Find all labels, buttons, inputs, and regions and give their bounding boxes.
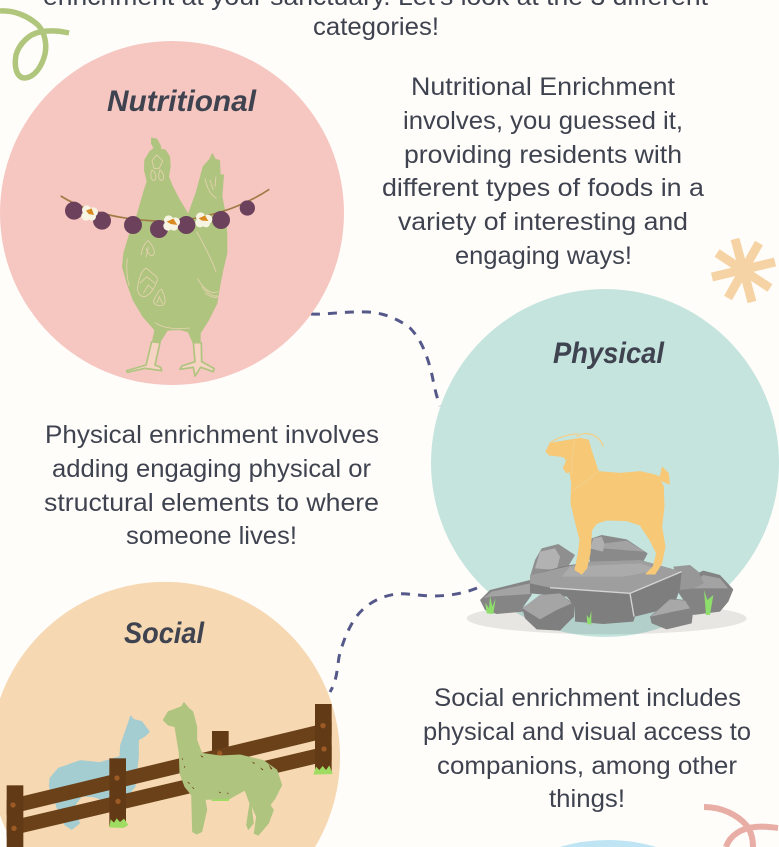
physical circle (431, 289, 779, 637)
panel: physical (431, 289, 779, 637)
nutritional heading: Nutritional (107, 85, 257, 118)
physical description: Physical enrichment involves (45, 421, 379, 449)
social description: companions, among other (437, 752, 737, 780)
nutritional description: providing residents with (404, 141, 682, 169)
dashed connector: physical to social (330, 588, 477, 692)
nutritional description: engaging ways! (455, 242, 632, 270)
dashed connector: nutritional to physical (311, 312, 440, 406)
decorative pink squiggle (704, 807, 778, 847)
physical heading: Physical (553, 337, 665, 370)
decorative orange asterisk (712, 239, 775, 302)
physical description: structural elements to where (44, 489, 379, 517)
social description (423, 684, 751, 813)
nutritional description: Nutritional Enrichment (411, 73, 675, 101)
social description: things! (549, 785, 625, 813)
intro text: categories! (313, 13, 439, 41)
nutritional description (382, 73, 704, 270)
nutritional circle (0, 41, 344, 385)
icon: goat on rocks (467, 434, 747, 634)
physical description: adding engaging physical or (52, 455, 371, 483)
social heading: Social (124, 617, 205, 650)
panel: social (0, 582, 340, 847)
physical description: someone lives! (126, 522, 297, 550)
next panel: blue circle (559, 840, 657, 847)
icon: chicken with garland (61, 138, 269, 376)
nutritional description: different types of foods in a (382, 174, 704, 202)
social circle (0, 582, 340, 847)
decorative green squiggle (0, 11, 69, 78)
social description: Social enrichment includes (434, 684, 741, 712)
social description: physical and visual access to (423, 718, 751, 746)
icon: alpacas and fence (7, 703, 333, 847)
nutritional description: involves, you guessed it, (403, 107, 683, 135)
nutritional description: variety of interesting and (398, 208, 688, 236)
panel: nutritional (0, 41, 344, 385)
physical description (44, 421, 379, 550)
intro text (43, 0, 708, 41)
